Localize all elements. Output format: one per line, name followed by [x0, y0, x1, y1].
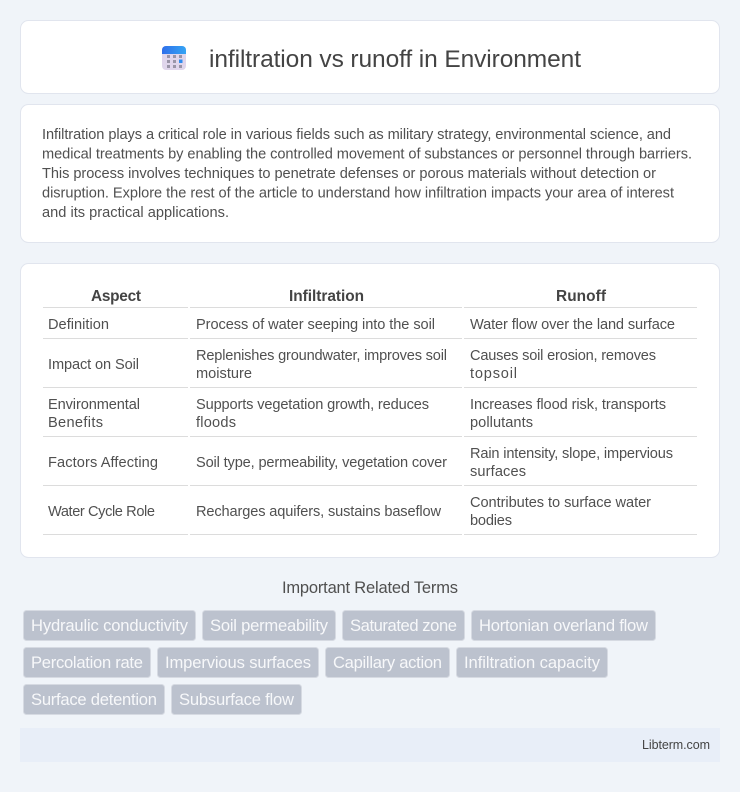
panel: comparison table [20, 264, 720, 558]
title: infiltration vs runoff in Environment [209, 46, 581, 73]
table row: impact on soil: Causes soil erosion, removes [470, 348, 656, 364]
panel: header [20, 20, 720, 94]
table header: Infiltration [289, 288, 364, 305]
tag: soil permeability: Soil permeability [210, 616, 329, 635]
tag: infiltration capacity [456, 648, 608, 678]
table header [91, 288, 607, 305]
tag: saturated zone: Saturated zone [350, 616, 457, 635]
table row: environmental benefits: pollutants [470, 415, 533, 431]
tag: capillary action [326, 648, 450, 678]
table row: environmental benefits: Benefits [48, 415, 103, 431]
table row: environmental benefits: Increases flood risk, transports [470, 397, 666, 413]
table row: water cycle role: Contributes to surface water [470, 495, 651, 511]
text block: introduction paragraph: Infiltration plays a critical role in various fields such as military strategy, environmental science, and [42, 127, 671, 143]
table row: water cycle role: Recharges aquifers, sustains baseflow [196, 504, 441, 520]
tag: hydraulic conductivity: Hydraulic conductivity [31, 616, 189, 635]
table row: factors affecting: Factors Affecting [48, 455, 158, 471]
text block: introduction paragraph: disruption. Explore the rest of the article to understand how infiltration impacts your area of interest [42, 186, 674, 202]
tag: hortonian overland flow [472, 610, 656, 640]
table row: factors affecting [48, 446, 673, 480]
table row: water cycle role [48, 495, 651, 529]
table header: Aspect [91, 288, 141, 305]
tag: saturated zone [342, 610, 464, 640]
table row: impact on soil: topsoil [470, 366, 517, 382]
panel: introduction [20, 104, 720, 242]
footer credit: Libterm.com [642, 738, 710, 752]
table row: factors affecting: Soil type, permeability, vegetation cover [196, 455, 447, 471]
table row: water cycle role: bodies [470, 513, 512, 529]
tag: impervious surfaces: Impervious surfaces [165, 653, 311, 672]
heading: important related terms: Important Related Terms [282, 579, 458, 597]
table row: factors affecting: Rain intensity, slope, impervious [470, 446, 673, 462]
table row: definition: Process of water seeping into the soil [196, 317, 435, 333]
table row: factors affecting: surfaces [470, 464, 526, 480]
text block: introduction paragraph: and its practical applications. [42, 205, 229, 221]
table header: Runoff [556, 288, 607, 305]
tag: surface detention [24, 684, 164, 714]
table row: definition [48, 317, 675, 333]
table row: impact on soil: Impact on Soil [48, 357, 139, 373]
table row: environmental benefits: Environmental [48, 397, 140, 413]
tag: infiltration capacity: Infiltration capacity [464, 653, 601, 672]
table row: definition: Water flow over the land surface [470, 317, 675, 333]
table row: environmental benefits: Supports vegetation growth, reduces [196, 397, 429, 413]
tag: percolation rate: Percolation rate [31, 653, 143, 672]
tag: hydraulic conductivity [24, 610, 196, 640]
tag: impervious surfaces [158, 648, 318, 678]
tag: subsurface flow [172, 684, 302, 714]
tag: percolation rate [24, 648, 150, 678]
tag: hortonian overland flow: Hortonian overland flow [479, 616, 649, 635]
text block: introduction paragraph [42, 127, 692, 221]
icon: calendar [162, 46, 186, 70]
table row: impact on soil [48, 348, 656, 382]
tag: soil permeability [202, 610, 336, 640]
table row: impact on soil: Replenishes groundwater, improves soil [196, 348, 447, 364]
table row: environmental benefits: floods [196, 415, 236, 431]
tag: capillary action: Capillary action [333, 653, 442, 672]
tag: subsurface flow: Subsurface flow [179, 690, 295, 709]
table row: definition: Definition [48, 317, 109, 333]
tag: surface detention: Surface detention [31, 690, 157, 709]
table row: impact on soil: moisture [196, 366, 252, 382]
tags: related terms [24, 610, 656, 714]
footer [20, 728, 720, 762]
text block: introduction paragraph: This process involves techniques to penetrate defenses or porous materials without detection or [42, 166, 656, 182]
table row: water cycle role: Water Cycle Role [48, 504, 155, 520]
table row: environmental benefits [48, 397, 666, 431]
text block: introduction paragraph: medical treatments by enabling the controlled movement of substances or personnel through barriers. [42, 146, 692, 162]
